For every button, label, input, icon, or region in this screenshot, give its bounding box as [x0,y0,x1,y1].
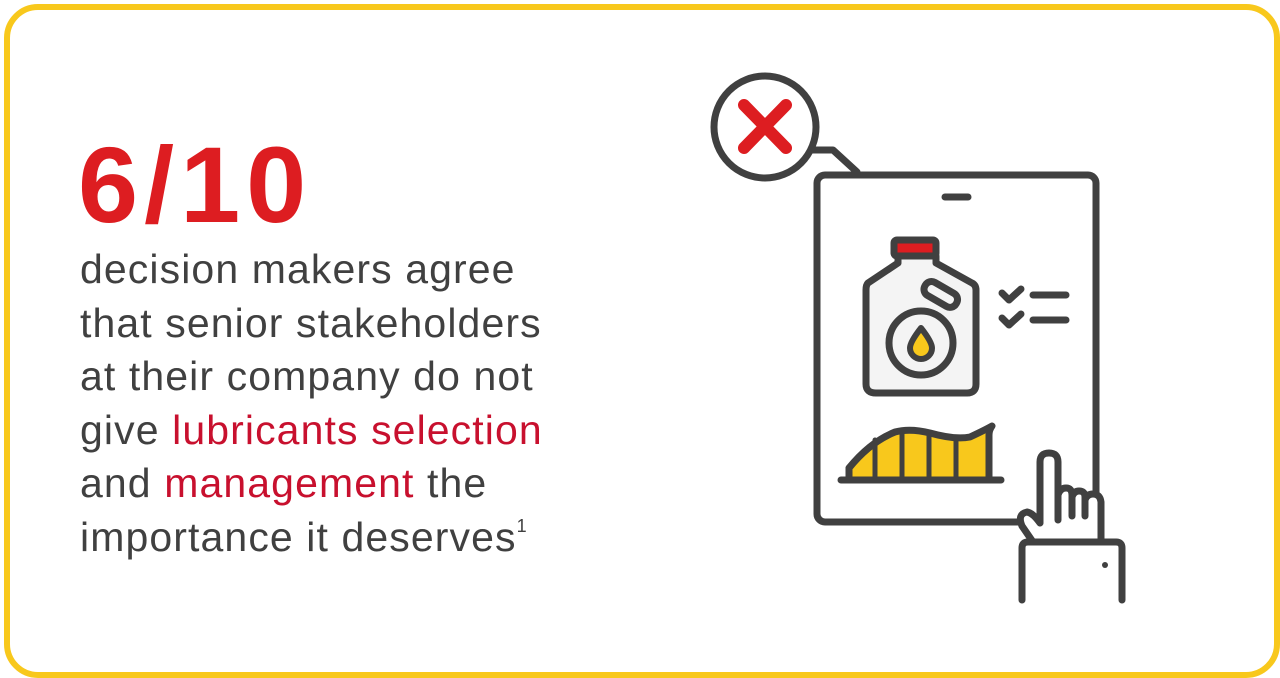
text block: description: decision makers agree [80,246,516,292]
text block: description: give lubricants selection [80,406,543,452]
headline stat: 6/10 [78,124,312,245]
text block: description [80,246,543,560]
text block: description: that senior stakeholders [80,300,542,346]
text block: description: importance it deserves1 [80,514,528,560]
icon: checklist [1002,289,1066,325]
icon: pointing hand [1020,453,1122,600]
icon: oil jug [866,240,976,393]
text block: description: at their company do not [80,353,534,399]
icon: magnifier with red x [714,76,857,178]
text block: description: and management the [80,460,487,506]
chart: yellow bars [841,426,1001,480]
tablet [817,175,1096,522]
